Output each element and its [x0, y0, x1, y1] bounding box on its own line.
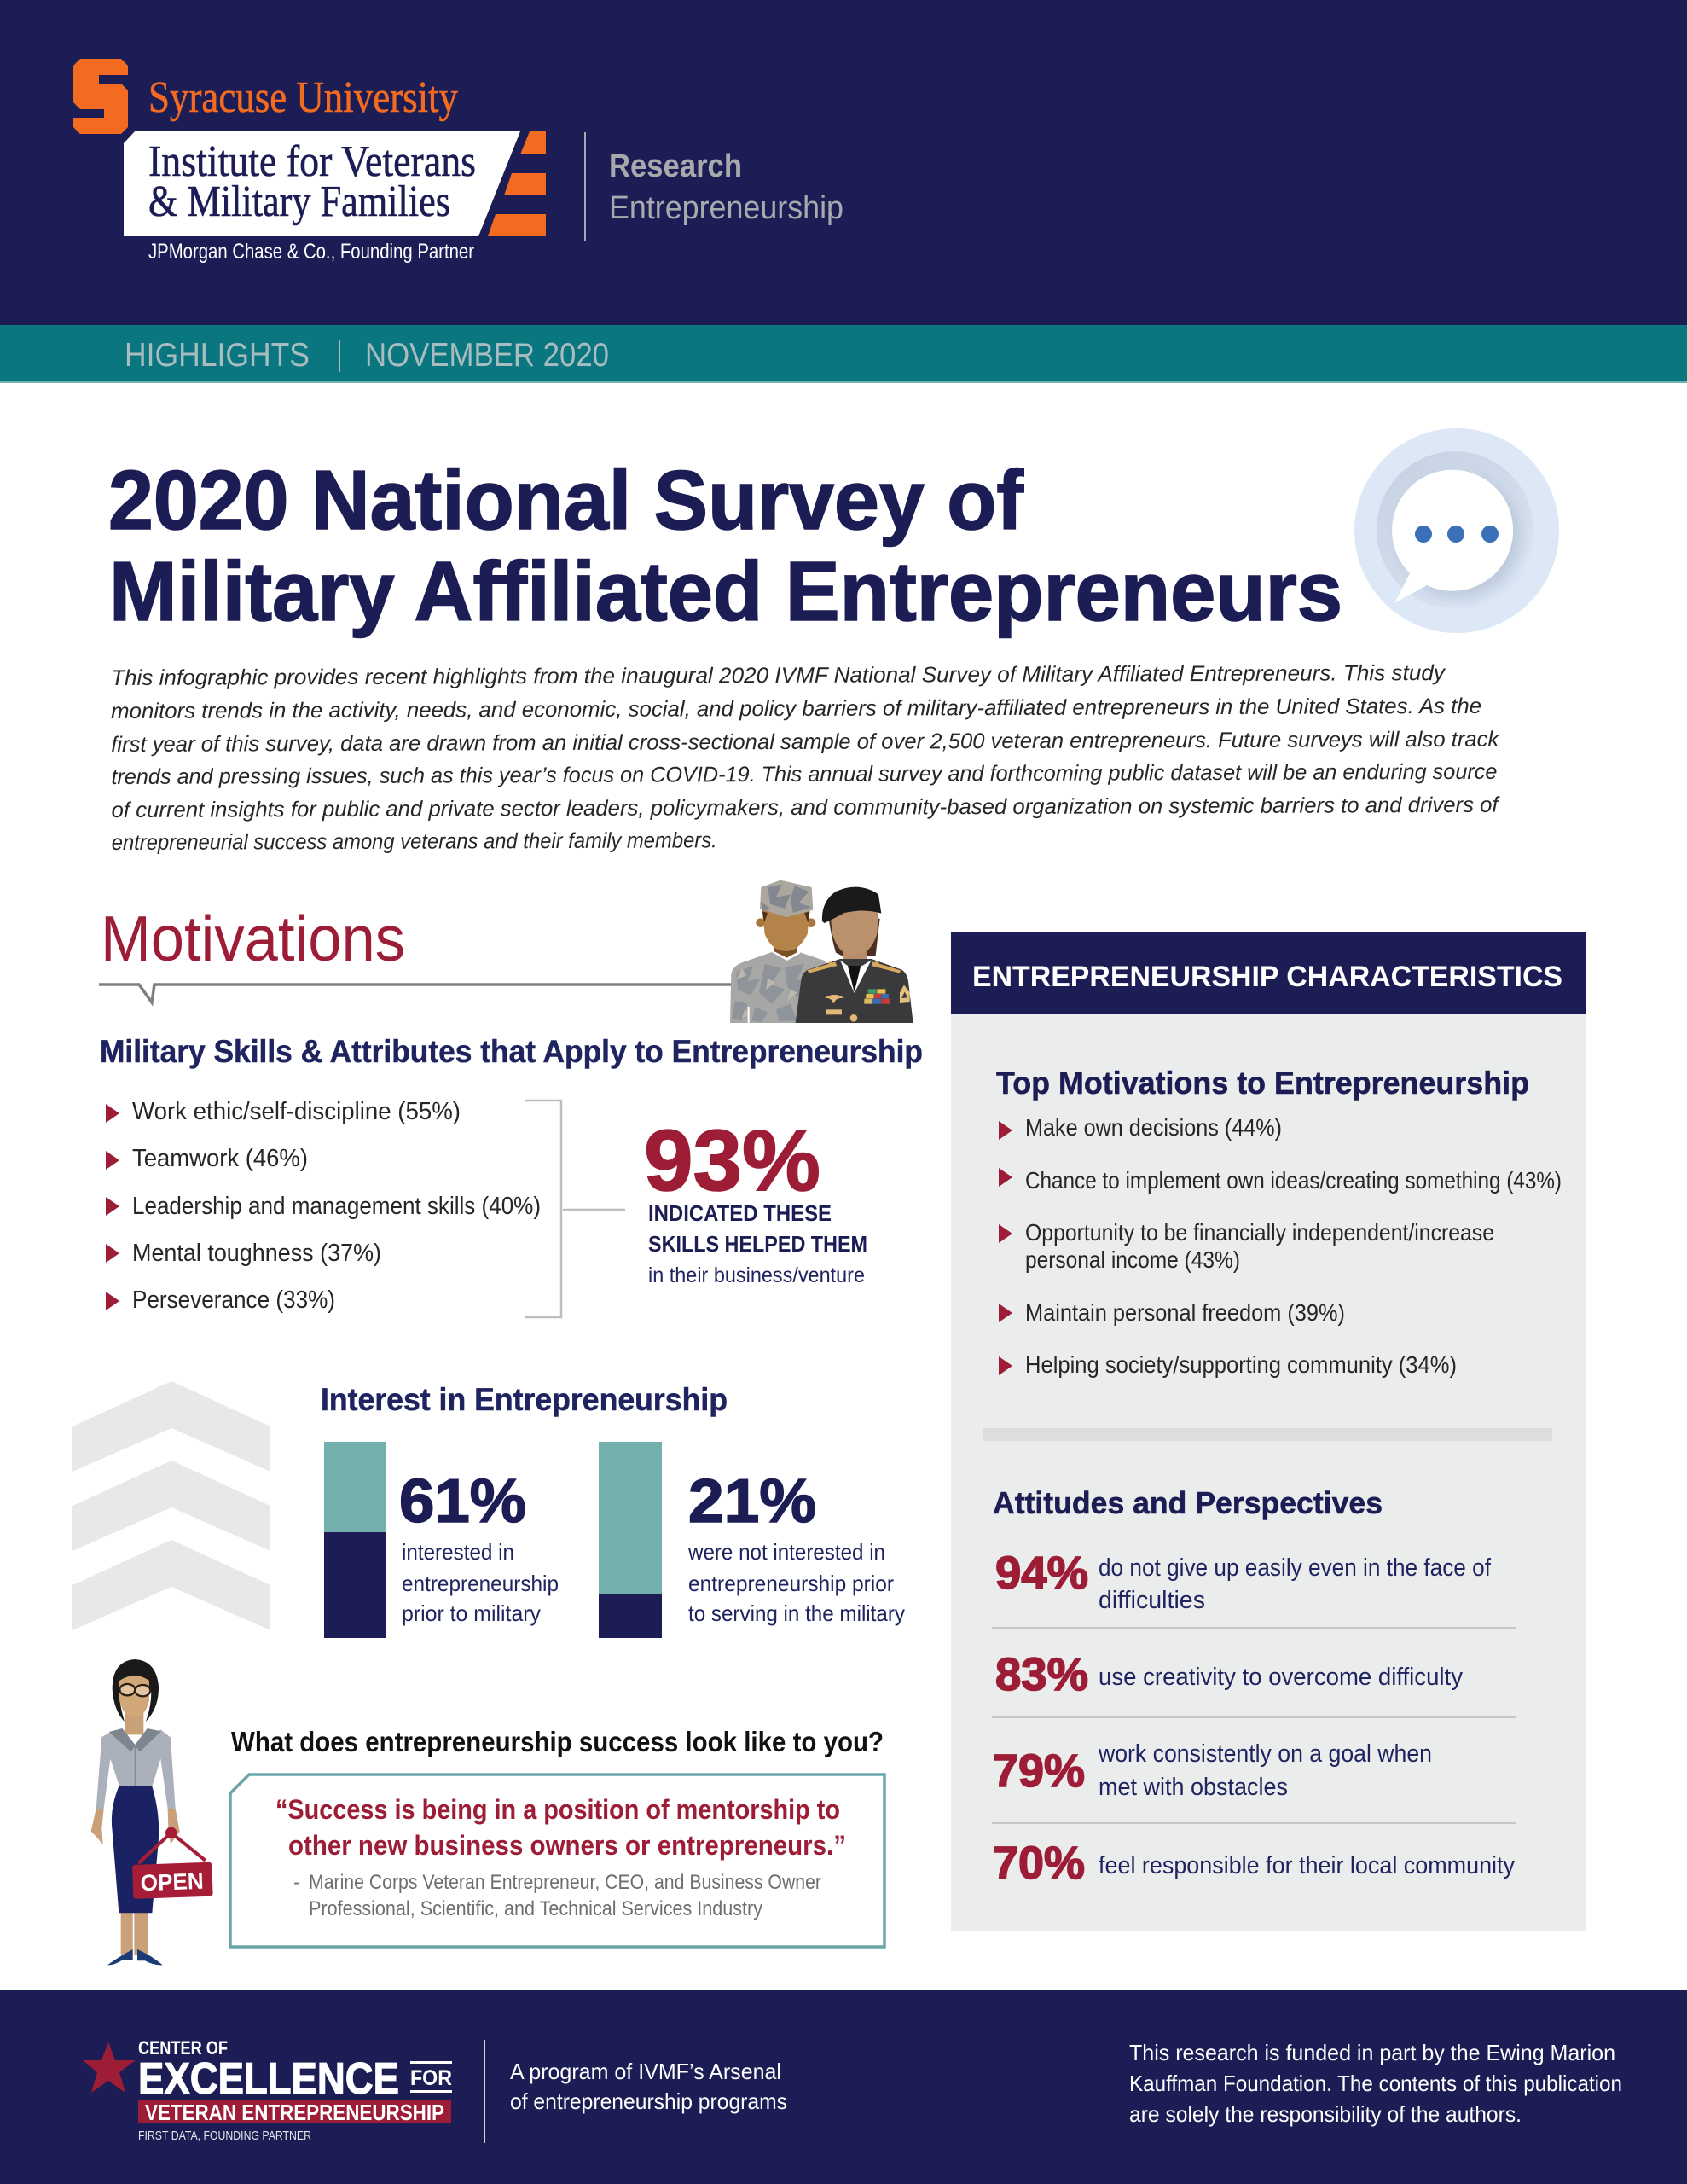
- list: top motivations: personal income (43%): [1025, 1246, 1240, 1273]
- stat bar: 21%: 21%: [688, 1467, 816, 1536]
- female soldier: [796, 887, 913, 1023]
- intro paragraph: of current insights for public and private sector leaders, policymakers, and community-based organization on systemic barriers to and drivers of: [112, 793, 1501, 822]
- main title: 2020 National Survey of: [108, 453, 1023, 547]
- logo: Center of Excellence: VETERAN ENTREPRENEURSHIP: [145, 2100, 444, 2125]
- stat: 94%: do not give up easily even in the face of: [1099, 1554, 1492, 1582]
- quote box: -: [293, 1871, 300, 1894]
- stat: 79%: [993, 1740, 1432, 1801]
- bracket connector: [525, 1101, 625, 1317]
- highlights band: HIGHLIGHTS: [125, 337, 310, 374]
- icon: two soldiers: [730, 880, 913, 1023]
- stat bar: 61%: 61%: [399, 1467, 526, 1536]
- intro paragraph: trends and pressing issues, such as this year’s focus on COVID-19. This annual survey and forthcoming public dataset will be an enduring source: [111, 760, 1497, 789]
- stat: 70%: 70%: [993, 1838, 1085, 1889]
- stat: 93%: [644, 1113, 867, 1287]
- list: top motivations: Helping society/supporting community (34%): [1025, 1351, 1457, 1378]
- funding note: This research is funded in part by the Ewing Marion: [1129, 2040, 1615, 2065]
- callout rule under Motivations: [99, 985, 733, 1002]
- heading: Motivations: Motivations: [101, 903, 405, 974]
- stat bar: 61%: entrepreneurship: [402, 1571, 559, 1596]
- illustration: businesswoman with open sign: [91, 1659, 213, 1965]
- stat: 79%: work consistently on a goal when: [1098, 1740, 1432, 1768]
- stat: 83%: [995, 1649, 1463, 1700]
- list: top motivations: Opportunity to be financially independent/increase: [1025, 1219, 1494, 1246]
- quote box: other new business owners or entrepreneurs.”: [288, 1830, 846, 1861]
- list: top motivations: Make own decisions (44%): [1025, 1114, 1282, 1141]
- stat: 93%: in their business/venture: [648, 1263, 865, 1287]
- logo: Center of Excellence: FIRST DATA, FOUNDING PARTNER: [138, 2129, 311, 2143]
- stat: 93%: 93%: [644, 1113, 820, 1209]
- stat: 70%: [993, 1838, 1515, 1889]
- program note: [510, 2059, 787, 2114]
- main title: [108, 453, 1342, 638]
- list: military skills: Teamwork (46%): [132, 1145, 308, 1172]
- stat: 94%: difficulties: [1099, 1587, 1205, 1614]
- stat: 94%: 94%: [995, 1548, 1088, 1599]
- logo: Center of Excellence: EXCELLENCE: [138, 2054, 399, 2104]
- stat: 70%: feel responsible for their local community: [1099, 1852, 1515, 1879]
- intro paragraph: first year of this survey, data are drawn from an initial cross-sectional sample of over 2,500 veteran entrepreneurs. Future surveys will also track: [111, 728, 1500, 757]
- founding partner line: JPMorgan Chase & Co., Founding Partner: [148, 240, 474, 264]
- stat: 93%: SKILLS HELPED THEM: [648, 1231, 867, 1257]
- heading: Military Skills & Attributes: Military Skills & Attributes that Apply to Entrepreneurship: [100, 1034, 923, 1069]
- stat bar: 21%: to serving in the military: [688, 1600, 905, 1626]
- header label: Entrepreneurship: Entrepreneurship: [609, 190, 844, 226]
- panel header: [951, 932, 1586, 1014]
- header label: Research: Research: [609, 148, 742, 184]
- list: top motivations: Maintain personal freedom (39%): [1025, 1299, 1345, 1326]
- heading: top motivations: Top Motivations to Entrepreneurship: [996, 1066, 1529, 1101]
- intro paragraph: monitors trends in the activity, needs, and economic, social, and policy barriers of military-affiliated entrepreneurs in the United States. As the: [111, 694, 1481, 723]
- IVMF logo plate: Institute for Veterans: [148, 137, 476, 186]
- decorative chevrons: [72, 1381, 270, 1630]
- list: military skills: Perseverance (33%): [132, 1287, 335, 1314]
- funding note: [1129, 2040, 1622, 2127]
- illustration: businesswoman with open sign: OPEN: [140, 1868, 204, 1896]
- heading: attitudes and perspectives: Attitudes and Perspectives: [993, 1485, 1383, 1520]
- list: military skills: [106, 1098, 541, 1314]
- stat: 83%: use creativity to overcome difficulty: [1099, 1664, 1463, 1691]
- stat: 79%: met with obstacles: [1099, 1774, 1288, 1801]
- icon: Syracuse block S: [73, 59, 128, 134]
- list: top motivations: [999, 1114, 1562, 1378]
- stat bar: 61%: interested in: [402, 1539, 514, 1565]
- header banner: [0, 0, 1687, 325]
- stat bar: 21%: were not interested in: [687, 1539, 885, 1565]
- stat bar: 61%: prior to military: [402, 1600, 541, 1626]
- footer band: [0, 1990, 1687, 2184]
- program note: of entrepreneurship programs: [510, 2088, 787, 2114]
- highlights band: NOVEMBER 2020: [365, 337, 609, 374]
- heading: success question: What does entrepreneurship success look like to you?: [231, 1726, 884, 1757]
- highlights band: [0, 325, 1687, 383]
- intro paragraph: entrepreneurial success among veterans and their family members.: [112, 828, 717, 855]
- stat bar: 21%: [599, 1442, 905, 1638]
- funding note: Kauffman Foundation. The contents of this publication: [1129, 2071, 1622, 2096]
- panel: entrepreneurship characteristics: [951, 932, 1586, 1931]
- stat bar: 61%: [324, 1442, 559, 1638]
- male soldier: [730, 880, 829, 1023]
- heading: Interest in Entrepreneurship: Interest in Entrepreneurship: [321, 1382, 728, 1417]
- Syracuse University wordmark: Syracuse University: [148, 73, 458, 122]
- logo: Center of Excellence: [83, 2037, 452, 2143]
- icon: speech bubble: [1354, 428, 1559, 633]
- main title: Military Affiliated Entrepreneurs: [109, 544, 1342, 638]
- IVMF logo plate: & Military Families: [148, 177, 450, 226]
- list: military skills: Work ethic/self-discipline (55%): [132, 1098, 461, 1125]
- stat bar: 21%: entrepreneurship prior: [688, 1571, 894, 1596]
- IVMF logo plate: [124, 131, 546, 236]
- stat: 93%: INDICATED THESE: [648, 1200, 832, 1226]
- list: military skills: Leadership and management skills (40%): [132, 1193, 541, 1220]
- funding note: are solely the responsibility of the authors.: [1129, 2101, 1522, 2127]
- quote box: [230, 1774, 884, 1947]
- stat: 79%: 79%: [993, 1745, 1085, 1797]
- panel header: ENTREPRENEURSHIP CHARACTERISTICS: [972, 961, 1562, 993]
- stat: 83%: 83%: [995, 1649, 1088, 1700]
- list: military skills: Mental toughness (37%): [132, 1240, 381, 1267]
- logo: Center of Excellence: CENTER OF: [138, 2037, 228, 2059]
- list: top motivations: Chance to implement own ideas/creating something (43%): [1025, 1167, 1562, 1194]
- quote box: “Success is being in a position of mentorship to: [275, 1794, 840, 1825]
- intro paragraph: This infographic provides recent highlights from the inaugural 2020 IVMF National Survey of Military Affiliated Entrepreneurs. This study: [111, 661, 1446, 690]
- quote box: Marine Corps Veteran Entrepreneur, CEO, and Business Owner: [309, 1871, 821, 1894]
- quote box: Professional, Scientific, and Technical Services Industry: [309, 1897, 762, 1920]
- intro paragraph: [111, 661, 1501, 855]
- stat: 94%: [995, 1548, 1492, 1614]
- logo: Center of Excellence: FOR: [410, 2066, 452, 2090]
- program note: A program of IVMF’s Arsenal: [510, 2059, 781, 2084]
